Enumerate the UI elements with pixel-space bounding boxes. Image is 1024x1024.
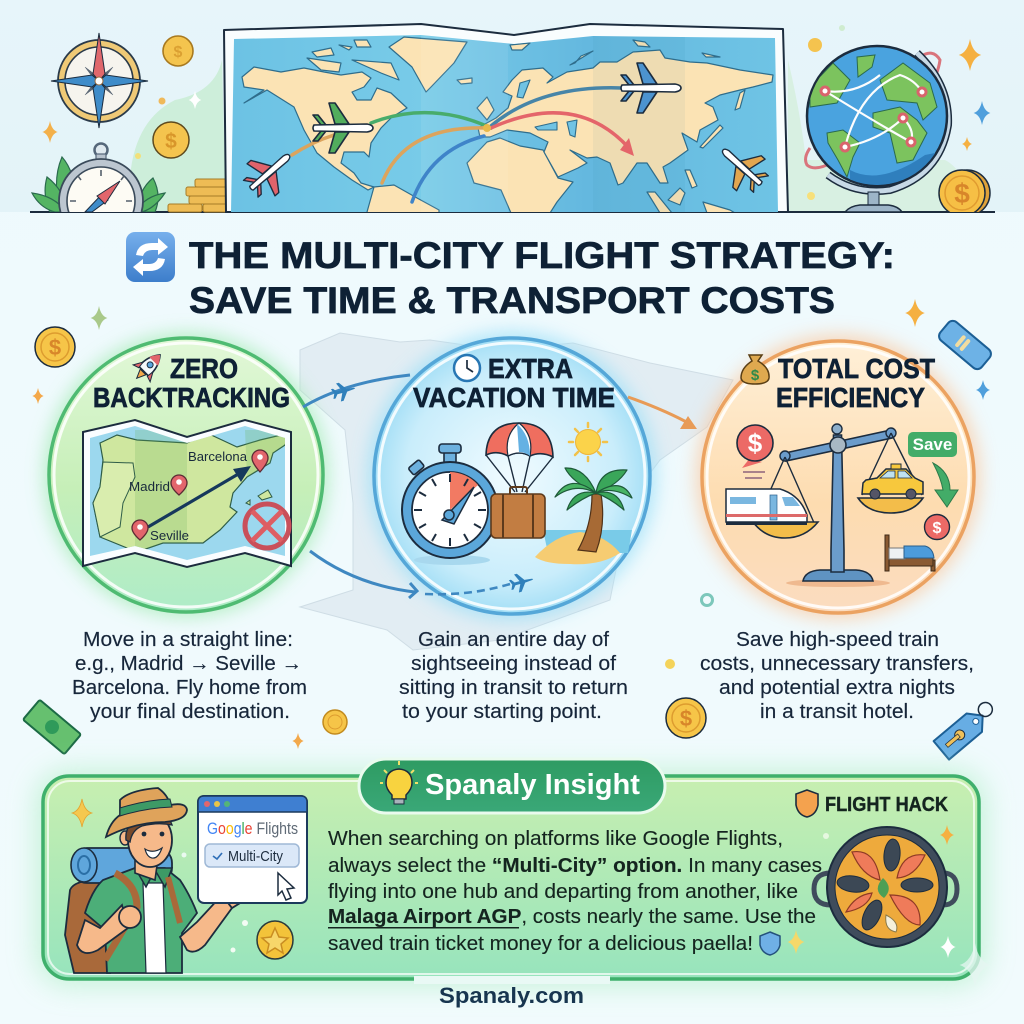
text: insight body: saved train ticket money for a delicious paella! [328, 933, 753, 955]
label: flight hack: FLIGHT HACK [825, 794, 948, 816]
panel: spanaly insight [36, 759, 990, 987]
sparkles: insight panel [72, 799, 990, 987]
heading: zero backtracking: BACKTRACKING [93, 382, 290, 413]
tag: top right [937, 318, 993, 372]
arrow: save down [933, 463, 958, 507]
text: extra vacation time: sitting in transit to return [399, 677, 628, 699]
illustration: palm tree [555, 468, 632, 552]
title: SAVE TIME & TRANSPORT COSTS [189, 280, 835, 321]
text: total cost efficiency: costs, unnecessary transfers, [700, 653, 974, 675]
icon: stopwatch and leaves [31, 142, 166, 212]
illustration: paella [814, 827, 957, 947]
text: insight body: When searching on platforms like Google Flights, [328, 828, 783, 850]
icon: price tag with key [934, 698, 1000, 760]
globe on stand [806, 46, 950, 212]
icon: red price pin [737, 425, 773, 478]
map of Spain: route: Barcelona [188, 449, 248, 464]
icon: coin top left: $ [174, 44, 183, 61]
text: extra vacation time [399, 629, 628, 723]
text: total cost efficiency: in a transit hotel. [760, 701, 914, 723]
text: insight body [328, 828, 822, 955]
icon: banknote [23, 700, 81, 754]
browser window [198, 796, 307, 903]
badge: save [908, 432, 957, 457]
icon: star coin [257, 921, 293, 959]
panel: extra vacation time [368, 332, 656, 620]
heading: zero backtracking [93, 353, 290, 413]
heading: total cost efficiency [776, 353, 935, 413]
icon: coin top left [163, 36, 193, 66]
text: zero backtracking: Move in a straight line: [83, 629, 293, 651]
land masses [242, 37, 773, 213]
badge: spanaly insight: Spanaly Insight [425, 769, 640, 801]
icon: light bulb [380, 761, 418, 804]
text: zero backtracking: e.g., Madrid → Seville → [75, 653, 302, 675]
map of Spain: route: Madrid [129, 479, 170, 494]
icon: sparkles [788, 930, 804, 954]
backpack [65, 880, 110, 973]
plane: blue [621, 63, 681, 113]
text: zero backtracking: Barcelona. Fly home from [72, 677, 307, 699]
text: zero backtracking [72, 629, 307, 723]
browser window: Multi-City [228, 848, 283, 865]
shrimp [846, 852, 925, 925]
heading: total cost efficiency: EFFICIENCY [776, 382, 925, 413]
coin: lower right [666, 698, 706, 738]
panel: zero backtracking [44, 333, 328, 617]
text: total cost efficiency [700, 629, 974, 723]
text: extra vacation time: Gain an entire day of [418, 629, 609, 651]
heading: extra vacation time: VACATION TIME [413, 382, 615, 413]
icon: hotel bed [885, 535, 935, 571]
illustration: high-speed train [726, 489, 807, 525]
illustration: stopwatch [402, 444, 498, 565]
icon: coin stack [168, 179, 230, 212]
arrow: straight route [148, 473, 240, 527]
arrow: orange link [628, 397, 697, 429]
icon: coin bottom right [939, 170, 990, 216]
pointing arm [180, 895, 232, 952]
title: THE MULTI-CITY FLIGHT STRATEGY: [189, 235, 895, 276]
illustration: sea and island [535, 530, 632, 564]
flight routes [292, 88, 628, 202]
hero band: world map scene [0, 23, 1024, 213]
illustration: parachute and suitcase [486, 423, 553, 538]
footer notch [414, 976, 610, 984]
text: insight body: Malaga Airport AGP , costs nearly the same. Use the [328, 906, 816, 928]
icon: rocket [128, 346, 169, 387]
arrowhead: red route [620, 138, 634, 156]
footer: site name: Spanaly.com [439, 983, 584, 1008]
sparkles: hero [42, 25, 990, 200]
mussels [836, 838, 933, 933]
near arm [77, 905, 128, 953]
illustration: balance scale [753, 424, 923, 587]
text: total cost efficiency: Save high-speed train [736, 629, 939, 651]
plane: orange [709, 134, 775, 200]
icon: red price pin: $ [748, 428, 763, 458]
coin: upper left [35, 327, 75, 367]
illustration: backpacker [65, 788, 250, 973]
heading: extra vacation time: EXTRA [488, 353, 573, 384]
decorative coins, tags and sparkles [23, 299, 1000, 760]
icon: compass [51, 33, 148, 128]
arrow: top blue flight link [303, 375, 410, 407]
plane: green [313, 103, 373, 153]
icon: coin mid left [153, 122, 189, 158]
icon: small shield [760, 932, 780, 955]
title [126, 232, 895, 321]
text: total cost efficiency: and potential extra nights [719, 677, 955, 699]
text: zero backtracking: your final destination. [90, 701, 290, 723]
head [135, 855, 158, 880]
folds [421, 34, 508, 212]
illustration: sun [569, 423, 607, 461]
heading: extra vacation time [413, 353, 615, 413]
map of Spain: route: Seville [150, 528, 189, 543]
pins [132, 450, 268, 540]
icon: money bag: $ [751, 367, 760, 384]
badge: save: Save [913, 435, 952, 454]
heading: zero backtracking: ZERO [170, 353, 238, 384]
icon: no-backtrack cross [245, 504, 289, 548]
text: insight body: flying into one hub and departing from another, like [328, 881, 798, 903]
map of Spain: route [83, 420, 291, 567]
label: flight hack [796, 790, 948, 817]
heading: total cost efficiency: TOTAL COST [778, 353, 935, 384]
icon: clock [454, 355, 480, 381]
panel: total cost efficiency [696, 335, 980, 619]
coin: lower right: $ [680, 706, 692, 731]
text: extra vacation time: sightseeing instead of [411, 653, 616, 675]
plane: red [237, 139, 303, 205]
hat [106, 788, 187, 837]
illustration: taxi [862, 464, 923, 499]
torso [85, 868, 197, 973]
background map of Spain [300, 333, 733, 650]
text: insight body: always select the “Multi-City” option. In many cases [328, 855, 822, 877]
icon: coin mid left: $ [165, 130, 177, 153]
coin: upper left: $ [49, 335, 61, 360]
icon: red dollar coin [924, 514, 950, 540]
arrow: lower blue flight link [310, 551, 536, 598]
browser window: Google Flights [207, 819, 298, 838]
icon: red dollar coin: $ [933, 520, 942, 537]
text: extra vacation time: to your starting point. [402, 701, 602, 723]
backpack strap [105, 873, 137, 960]
icon: coin bottom right: $ [954, 178, 970, 209]
icon: repeat arrows [126, 232, 175, 282]
badge: spanaly insight [359, 759, 665, 813]
folded world map [224, 24, 788, 213]
icon: shield [796, 790, 818, 817]
inland seas [517, 80, 577, 137]
coin: small centre [323, 710, 347, 734]
underline [328, 927, 519, 928]
icon: money bag [741, 355, 769, 384]
